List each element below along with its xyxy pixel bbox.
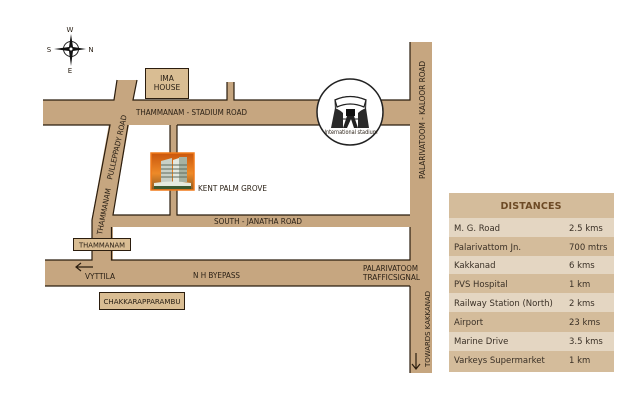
road label: Palarivattom - Kaloor Road: PALARIVATOOM - KALOOR ROAD	[418, 61, 427, 179]
row: Marine Drive	[449, 332, 614, 351]
arrow: to Vyttila	[76, 263, 93, 271]
row: Varkeys Supermarket: Varkeys Supermarket	[454, 356, 545, 366]
road label: Thammanam - Stadium Road: THAMMANAM - STADIUM ROAD	[135, 108, 247, 117]
table header	[449, 193, 614, 218]
road label: South Janatha Road: SOUTH - JANATHA ROAD	[214, 217, 302, 226]
row: Airport	[449, 312, 614, 332]
row: Palarivattom Jn.: 700 mtrs	[569, 243, 608, 253]
row: M. G. Road	[449, 218, 614, 237]
road label: Palarivatoom traffic signal	[362, 264, 421, 282]
table header: DISTANCES	[500, 201, 562, 212]
row: M. G. Road: M. G. Road	[454, 224, 500, 234]
project label: KENT PALM GROVE	[198, 184, 267, 193]
Chakkarapparambu box: CHAKKARAPPARAMBU	[104, 298, 180, 306]
Thammanam box	[74, 238, 130, 250]
road label: Towards Kakkanad: TOWARDS KAKKANAD	[424, 291, 432, 368]
compass: E	[68, 67, 72, 75]
compass	[47, 26, 94, 75]
road label: Vyttila: VYTTILA	[85, 272, 116, 281]
stadium icon: International stadium	[324, 130, 378, 136]
Thammanam box: THAMMANAM	[78, 242, 125, 250]
row: Railway Station (North)	[449, 293, 614, 312]
distances table	[449, 193, 614, 372]
row: Kakkanad: 6 kms	[569, 261, 595, 271]
arrow: towards Kakkanad	[412, 353, 420, 369]
row: Marine Drive: 3.5 kms	[569, 337, 603, 347]
row: Palarivattom Jn.: Palarivattom Jn.	[454, 243, 521, 253]
row: PVS Hospital	[449, 274, 614, 293]
row: Kakkanad	[449, 256, 614, 274]
row: Palarivattom Jn.	[449, 237, 614, 256]
road label: Pullepady Road: PULLEPPADY ROAD	[105, 114, 129, 180]
compass: S	[47, 46, 52, 54]
building photo: Kent Palm Grove	[151, 153, 194, 190]
row: Marine Drive: Marine Drive	[454, 337, 508, 347]
row: Airport: 23 kms	[569, 318, 601, 328]
Chakkarapparambu box	[100, 292, 184, 310]
row: Railway Station (North): Railway Station (North)	[454, 299, 553, 309]
row: Varkeys Supermarket	[449, 351, 614, 372]
row: Airport: Airport	[454, 318, 484, 328]
compass: W	[67, 26, 74, 34]
road label: NH Bypass: N H BYEPASS	[193, 271, 240, 280]
row: M. G. Road: 2.5 kms	[569, 224, 603, 234]
row: PVS Hospital: 1 km	[569, 280, 590, 290]
road label: Palarivatoom traffic signal: TRAFFICSIGNAL	[362, 273, 421, 282]
road network	[43, 42, 432, 373]
row: PVS Hospital: PVS Hospital	[454, 280, 508, 290]
compass: N	[88, 46, 94, 54]
row: Railway Station (North): 2 kms	[569, 299, 595, 309]
IMA House box	[146, 68, 188, 98]
IMA House box: IMA	[160, 74, 175, 83]
stadium icon	[317, 79, 383, 145]
road label: Thammanam vertical: THAMMANAM	[95, 188, 113, 236]
road label: Palarivatoom traffic signal: PALARIVATOOM	[363, 264, 418, 273]
IMA House box: HOUSE	[154, 83, 181, 92]
row: Varkeys Supermarket: 1 km	[569, 356, 590, 366]
row: Kakkanad: Kakkanad	[454, 261, 496, 271]
